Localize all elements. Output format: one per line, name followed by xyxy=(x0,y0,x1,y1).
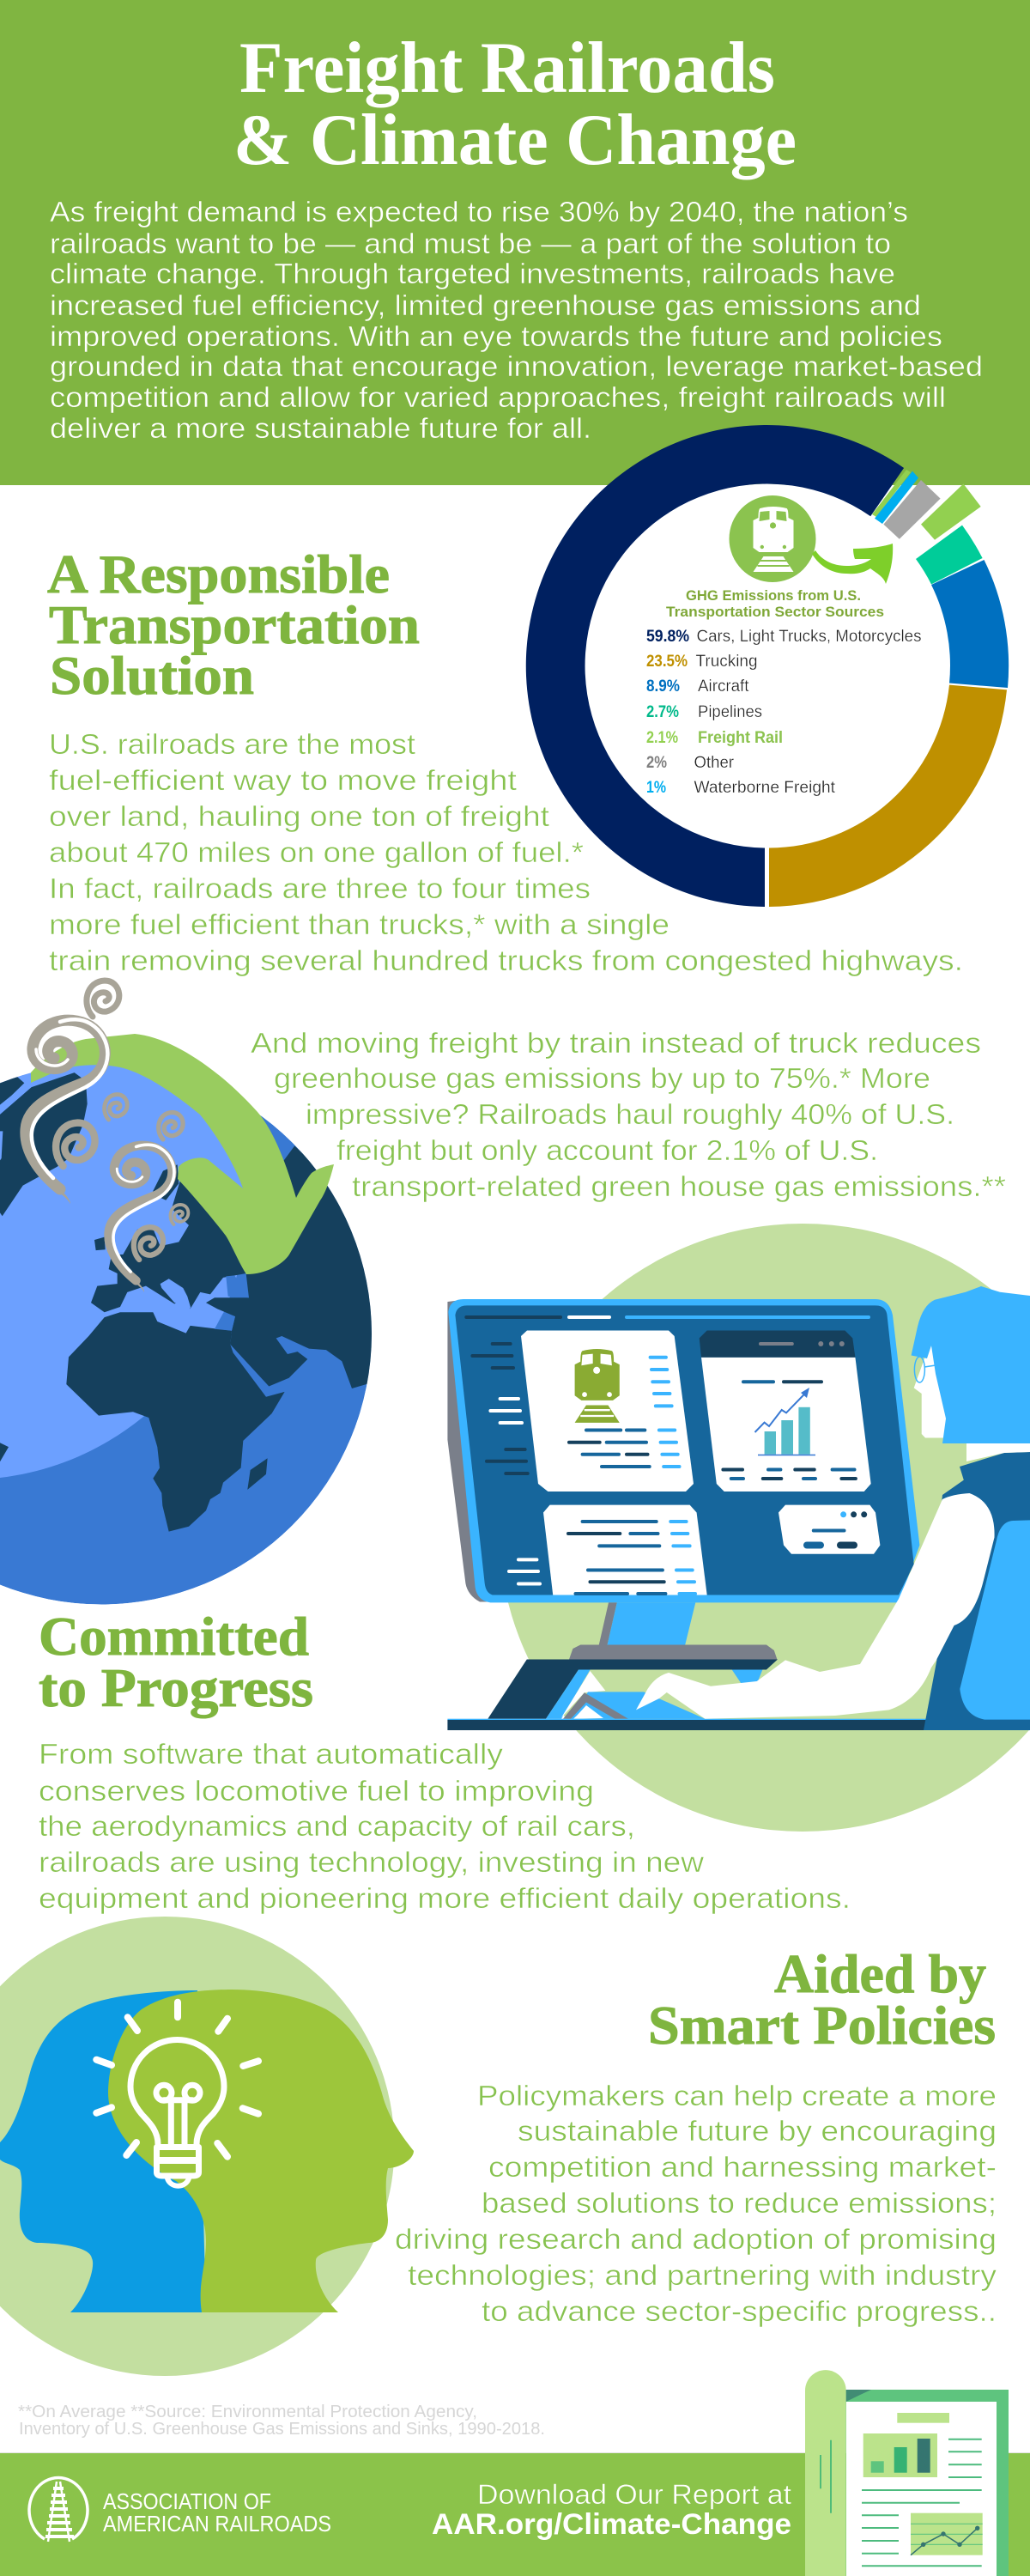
title: Freight Railroads xyxy=(239,27,775,108)
intro paragraph xyxy=(50,196,983,444)
icon: lightbulb xyxy=(96,2002,258,2186)
intro paragraph: deliver a more sustainable future for all. xyxy=(50,412,591,444)
person at desk xyxy=(636,1286,1030,1730)
heading: A Responsible Transportation Solution: Transportation xyxy=(49,594,420,655)
report document illustration xyxy=(805,2370,1009,2576)
background circle xyxy=(0,1917,395,2376)
text block: emissions reduction: And moving freight by train instead of truck reduces xyxy=(251,1027,981,1059)
heading: A Responsible Transportation Solution xyxy=(47,544,420,706)
arrow: rail share pointer xyxy=(812,544,893,584)
text block: technology: From software that automatically xyxy=(39,1738,504,1770)
text block: policies: competition and harnessing market- xyxy=(488,2151,997,2183)
text block: policies xyxy=(395,2080,997,2327)
text block: fuel efficiency: In fact, railroads are three to four times xyxy=(49,872,591,904)
logo wordmark: AMERICAN RAILROADS xyxy=(103,2511,331,2537)
text block: technology: the aerodynamics and capacity of rail cars, xyxy=(39,1810,635,1842)
chart legend: 59.8% xyxy=(646,628,689,646)
text block: policies: based solutions to reduce emissions; xyxy=(482,2187,997,2219)
heading: Aided by Smart Policies: Smart Policies xyxy=(648,1995,996,2056)
chart legend: 1% xyxy=(646,779,666,797)
icon: train on screen xyxy=(575,1349,620,1423)
mini bar chart on screen xyxy=(755,1388,815,1455)
keyboard and desk xyxy=(447,1659,928,1730)
text block: fuel efficiency: U.S. railroads are the most xyxy=(49,728,415,760)
intro paragraph: railroads want to be — and must be — a part of the solution to xyxy=(50,228,891,259)
text block: emissions reduction: impressive? Railroads haul roughly 40% of U.S. xyxy=(306,1098,954,1130)
chart heading: Transportation Sector Sources xyxy=(666,604,884,620)
text block: policies: Policymakers can help create a more xyxy=(477,2080,997,2111)
donut chart: GHG emissions xyxy=(526,425,1009,907)
text block: emissions reduction: transport-related green house gas emissions.** xyxy=(352,1170,1006,1202)
text block: fuel efficiency xyxy=(49,728,963,976)
monitor xyxy=(447,1299,919,1602)
intro paragraph: increased fuel efficiency, limited greenhouse gas emissions and xyxy=(50,289,921,321)
globe illustration xyxy=(0,981,375,1604)
call to action: AAR.org/Climate-Change xyxy=(432,2508,791,2541)
smoke plume one xyxy=(26,981,183,1204)
heading: Committed to Progress xyxy=(39,1606,313,1718)
smoke plume two xyxy=(108,1145,188,1292)
header panel xyxy=(0,0,1030,485)
background circle xyxy=(499,1224,1030,1832)
chart legend: Freight Rail xyxy=(698,729,783,747)
text block: fuel efficiency: more fuel efficient than trucks,* with a single xyxy=(49,908,670,940)
text block: fuel efficiency: train removing several hundred trucks from congested highways. xyxy=(49,945,963,976)
text block: technology: railroads are using technology, investing in new xyxy=(39,1846,704,1878)
text block: emissions reduction: greenhouse gas emissions by up to 75%.* More xyxy=(274,1062,930,1094)
intro paragraph: competition and allow for varied approaches, freight railroads will xyxy=(50,381,946,413)
text block: policies: driving research and adoption of promising xyxy=(395,2223,997,2255)
icon: train in green circle xyxy=(730,495,815,582)
text block: technology xyxy=(39,1738,851,1914)
heading: Aided by Smart Policies: Aided by xyxy=(774,1943,986,2004)
globe with continents xyxy=(0,1030,375,1604)
chart legend: Waterborne Freight xyxy=(694,779,836,797)
chart legend xyxy=(646,628,922,797)
logo mark xyxy=(29,2477,88,2542)
chart legend: 2% xyxy=(646,754,667,772)
logo wordmark xyxy=(103,2488,331,2537)
footnote xyxy=(18,2403,545,2439)
chart legend: Pipelines xyxy=(698,703,762,721)
intro paragraph: grounded in data that encourage innovation, leverage market-based xyxy=(50,350,983,382)
chart heading: GHG Emissions from U.S. xyxy=(686,587,861,604)
text block: fuel efficiency: fuel-efficient way to move freight xyxy=(49,764,517,796)
chart legend: 2.7% xyxy=(646,703,679,721)
title: & Climate Change xyxy=(233,100,797,180)
heading: A Responsible Transportation Solution: A Responsible xyxy=(47,544,390,605)
text block: policies: technologies; and partnering with industry xyxy=(408,2259,997,2291)
intro paragraph: climate change. Through targeted investments, railroads have xyxy=(50,258,895,289)
text block: technology: conserves locomotive fuel to improving xyxy=(39,1775,594,1807)
chart legend: 8.9% xyxy=(646,677,680,696)
screen panels xyxy=(521,1331,880,1595)
green head xyxy=(108,1990,414,2312)
heads with lightbulb illustration xyxy=(0,1917,414,2376)
monitor stand xyxy=(569,1602,777,1659)
chart legend: Trucking xyxy=(695,653,757,671)
text block: emissions reduction xyxy=(251,1027,1006,1202)
heading: Committed to Progress: Committed xyxy=(39,1606,309,1667)
text block: technology: equipment and pioneering more efficient daily operations. xyxy=(39,1882,851,1914)
text block: policies: to advance sector-specific progress.. xyxy=(482,2295,997,2327)
footnote: **On Average **Source: Environmental Protection Agency, xyxy=(18,2403,477,2421)
chart legend: 23.5% xyxy=(646,653,688,671)
heading: Aided by Smart Policies xyxy=(648,1943,996,2056)
heading: A Responsible Transportation Solution: Solution xyxy=(50,645,254,706)
chart legend: Cars, Light Trucks, Motorcycles xyxy=(697,628,922,646)
chart legend: 2.1% xyxy=(646,729,678,747)
chart heading xyxy=(666,587,884,620)
footer band xyxy=(0,2370,1030,2576)
text block: policies: sustainable future by encouraging xyxy=(518,2115,997,2147)
text block: fuel efficiency: over land, hauling one ton of freight xyxy=(49,800,549,832)
call to action: Download Our Report at xyxy=(477,2479,791,2510)
blue head xyxy=(0,1990,206,2312)
computer user illustration xyxy=(447,1224,1030,1832)
arrow: curved green xyxy=(31,1034,334,1274)
call to action xyxy=(432,2479,791,2541)
text block: emissions reduction: freight but only account for 2.1% of U.S. xyxy=(336,1134,878,1166)
logo wordmark: ASSOCIATION OF xyxy=(103,2488,271,2514)
AAR logo xyxy=(29,2477,331,2542)
text block: fuel efficiency: about 470 miles on one gallon of fuel.* xyxy=(49,836,584,868)
chart legend: Aircraft xyxy=(698,677,749,696)
footnote: Inventory of U.S. Greenhouse Gas Emissions and Sinks, 1990-2018. xyxy=(19,2420,545,2439)
intro paragraph: improved operations. With an eye towards the future and policies xyxy=(50,320,942,352)
intro paragraph: As freight demand is expected to rise 30% by 2040, the nation’s xyxy=(50,196,908,228)
report line chart xyxy=(911,2513,983,2555)
heading: Committed to Progress: to Progress xyxy=(39,1657,313,1718)
report bar chart xyxy=(863,2433,937,2477)
title xyxy=(233,27,797,180)
chart legend: Other xyxy=(694,754,735,772)
